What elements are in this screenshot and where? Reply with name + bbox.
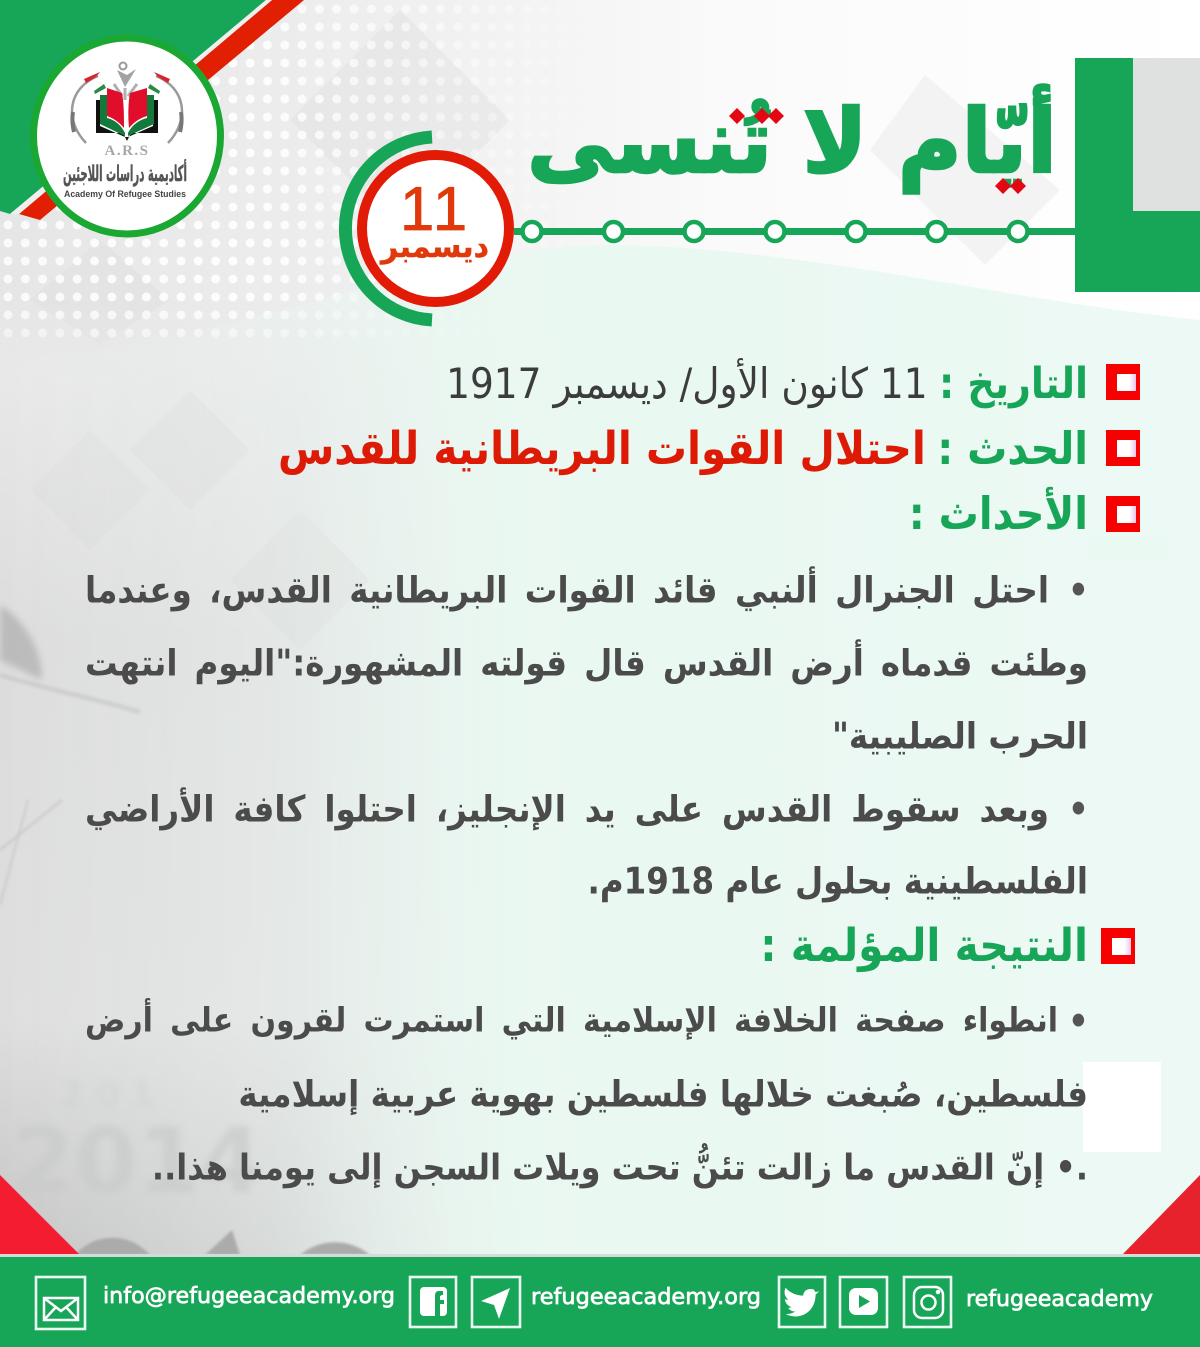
event line: الحدث : احتلال القوات البريطانية للقدس xyxy=(278,421,1088,475)
events paragraph 1 line 2: وطئت قدماه أرض القدس قال قولته المشهورة:"اليوم انتهت xyxy=(85,642,1088,685)
background artwork: 2014 xyxy=(12,1109,262,1214)
date number: 11 xyxy=(400,175,470,244)
icon: youtube xyxy=(849,1288,878,1315)
corner triangles xyxy=(0,1175,80,1255)
bullet: result xyxy=(1101,928,1135,964)
title: أيّام لا تُنسى xyxy=(527,84,1057,194)
result heading: النتيجة المؤلمة : xyxy=(760,918,1088,972)
red diamond dots xyxy=(729,108,1026,194)
header top-left green and red banner xyxy=(0,0,304,220)
clock xyxy=(0,675,140,905)
header corner block xyxy=(1075,58,1200,292)
logo badge xyxy=(30,34,224,238)
bullet dot: • xyxy=(1068,788,1089,831)
events paragraph 1 line 3: الحرب الصليبية" xyxy=(832,715,1088,758)
icon: instagram xyxy=(914,1287,943,1318)
footer text: handle: refugeeacademy xyxy=(966,1287,1153,1312)
result line 1: انطواء صفحة الخلافة الإسلامية التي استمرت لقرون على أرض xyxy=(85,1001,1058,1040)
icon: envelope xyxy=(44,1298,78,1320)
bullet: event xyxy=(1106,430,1140,466)
events paragraph 2 line 1: وبعد سقوط القدس على يد الإنجليز، احتلوا كافة الأراضي xyxy=(85,788,1049,831)
footer contents xyxy=(34,1276,1153,1330)
bullet: events xyxy=(1106,496,1140,532)
bullet dot: • xyxy=(1068,1000,1089,1043)
result line 2: فلسطين، صُبغت خلالها فلسطين بهوية عربية إسلامية xyxy=(238,1073,1088,1116)
timeline line with nodes xyxy=(514,220,1075,244)
events heading: الأحداث : xyxy=(909,489,1088,540)
bullet dot: • xyxy=(1068,569,1089,612)
events paragraph 2 line 2: الفلسطينية بحلول عام 1918م. xyxy=(587,860,1088,903)
logo english caption: Academy Of Refugee Studies xyxy=(64,189,186,199)
background artwork: 2 0 1 xyxy=(60,1075,155,1115)
events paragraph 1 line 1: احتل الجنرال ألنبي قائد القوات البريطانية القدس، وعندما xyxy=(85,569,1049,612)
date badge xyxy=(338,130,514,326)
logo letters: A.R.S xyxy=(104,143,150,159)
icon: twitter xyxy=(785,1288,819,1316)
result line 3: .• إنّ القدس ما زالت تئنُّ تحت ويلات السجن إلى يومنا هذا.. xyxy=(152,1146,1088,1189)
icon: facebook xyxy=(420,1287,447,1316)
footer bar xyxy=(0,1254,1200,1347)
footer text: email: info@refugeeacademy.org xyxy=(103,1284,395,1309)
date month: ديسمبر xyxy=(379,229,489,265)
icon: telegram arrow xyxy=(481,1288,510,1319)
icon: open book emblem xyxy=(72,62,182,143)
bullet: date xyxy=(1106,364,1140,400)
footer text: website: refugeeacademy.org xyxy=(531,1285,761,1310)
date line: التاريخ : 11 كانون الأول/ ديسمبر 1917 xyxy=(446,359,1088,408)
